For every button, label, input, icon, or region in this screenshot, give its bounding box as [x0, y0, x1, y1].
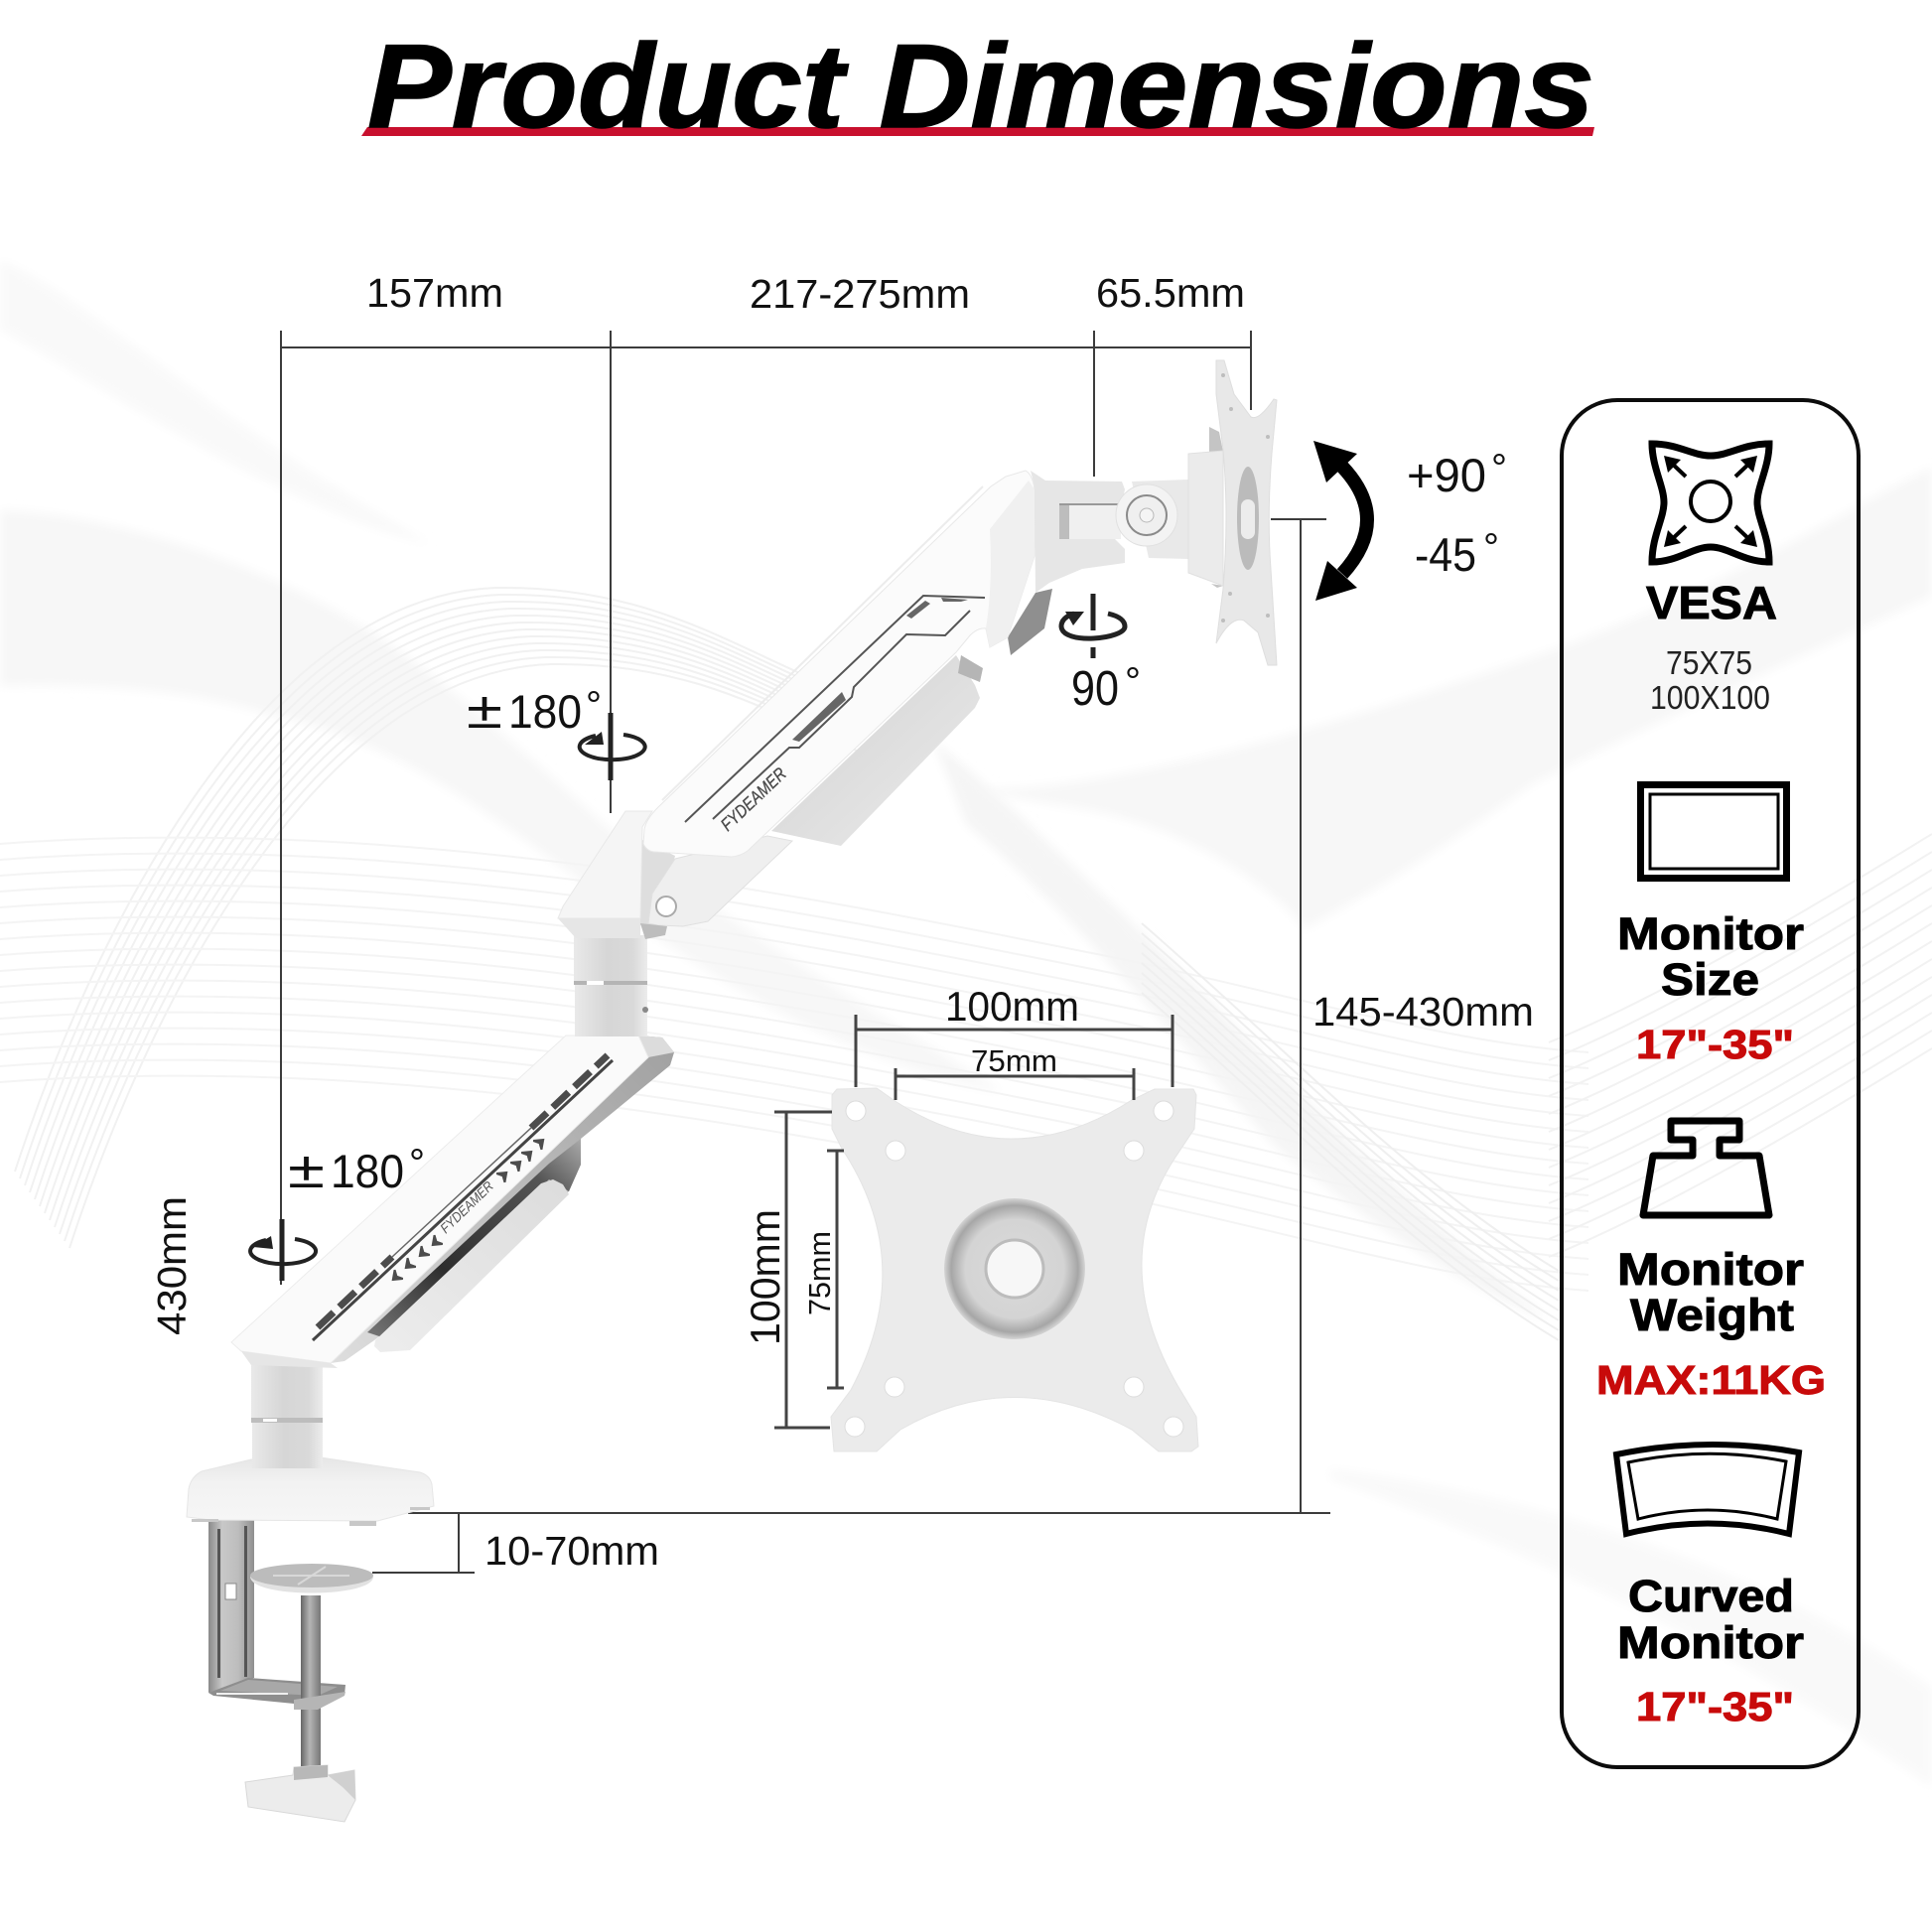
plate outline	[831, 1088, 1198, 1451]
lower column	[251, 1363, 323, 1468]
upper arm gas cover	[771, 655, 980, 846]
rotation label: 180 at base	[288, 1142, 425, 1199]
heading: monitor size: Size	[1661, 954, 1759, 1005]
side view of VESA plate	[1216, 360, 1277, 665]
value: monitor size: 17"-35"	[1636, 1022, 1794, 1067]
rotation label: 90 at head: 90	[1071, 662, 1119, 716]
monitor arm product illustration	[187, 360, 1277, 1822]
tilt block	[1188, 427, 1223, 588]
swivel head	[1031, 471, 1188, 593]
lower arm underside	[331, 1035, 674, 1363]
icon: VESA plate	[1652, 444, 1769, 562]
pivot pin	[656, 897, 676, 916]
VESA label: 75mm vertical: 75mm	[802, 1231, 837, 1315]
heading: monitor weight: Weight	[1630, 1290, 1794, 1340]
rotation label: 180 at elbow: °	[586, 684, 602, 728]
brand lower: FYDEAMER	[437, 1177, 496, 1236]
tilt label: -45: °	[1483, 526, 1499, 570]
icon: monitor	[1640, 784, 1787, 878]
VESA dimension lines	[774, 1015, 1173, 1428]
tilt double arrow	[1313, 441, 1367, 601]
clamp handle	[245, 1765, 355, 1822]
clamp base	[187, 1457, 434, 1526]
panel: specifications	[1562, 400, 1859, 1767]
icon: curved monitor	[1616, 1445, 1799, 1534]
tilt label: +90: +90	[1407, 449, 1486, 501]
heading: curved monitor: Curved	[1628, 1571, 1794, 1621]
dimension lines	[281, 331, 1330, 1573]
heading: monitor size: Monitor	[1617, 908, 1804, 959]
rotation label: 180 at elbow: 180	[508, 685, 582, 738]
VESA label: 75mm horizontal: 75mm	[971, 1043, 1057, 1078]
rotation icon at base	[250, 1219, 316, 1281]
rotation label: 180 at base: ±	[288, 1142, 325, 1199]
heading: monitor weight: Monitor	[1617, 1244, 1804, 1295]
heading: VESA: VESA	[1646, 577, 1777, 628]
column height label: 430mm: 430mm	[149, 1196, 195, 1335]
VESA sizes: 75X75	[1666, 644, 1752, 681]
rotation label: 180 at elbow	[467, 682, 602, 740]
top width label: 217-275mm: 217-275mm	[750, 271, 970, 317]
top width label: 157mm: 157mm	[366, 270, 503, 316]
heading: monitor size	[1617, 908, 1804, 1005]
value: curved monitor size: 17"-35"	[1636, 1684, 1794, 1729]
rotation label: 180 at base: 180	[331, 1145, 404, 1197]
clamp range label: 10-70mm: 10-70mm	[484, 1528, 659, 1574]
rotation icon at elbow	[580, 713, 645, 780]
clamp bracket	[208, 1519, 373, 1769]
lower arm top panel	[231, 1035, 648, 1368]
rotation label: 180 at base: °	[409, 1142, 425, 1185]
VESA sizes: 100X100	[1650, 679, 1770, 716]
mounting holes	[845, 1101, 1183, 1437]
upper arm lower link	[640, 836, 792, 939]
value: max weight: MAX:11KG	[1596, 1357, 1826, 1403]
elbow column	[574, 935, 648, 1036]
elbow block	[558, 811, 652, 938]
heading: curved monitor	[1617, 1571, 1804, 1668]
VESA label: 100mm vertical: 100mm	[742, 1209, 788, 1345]
background swooshes	[0, 260, 1932, 1787]
central hub	[944, 1198, 1085, 1339]
rotation label: 90 at head: °	[1125, 660, 1141, 704]
title with red underline: Product Dimensions	[367, 20, 1594, 153]
rotation icon at head	[1061, 594, 1125, 658]
brand upper: FYDEAMER	[717, 763, 790, 835]
tilt label: +90: °	[1491, 447, 1507, 490]
top width label: 65.5mm: 65.5mm	[1096, 270, 1245, 316]
tilt label: -45: -45	[1415, 528, 1476, 581]
VESA plate front view	[831, 1088, 1198, 1451]
heading: curved monitor: Monitor	[1617, 1617, 1804, 1668]
icon: weight	[1643, 1121, 1769, 1215]
upper arm panel	[643, 471, 1035, 857]
height label: 145-430mm: 145-430mm	[1312, 989, 1534, 1035]
heading: monitor weight	[1617, 1244, 1804, 1340]
head connector under arm	[958, 589, 1052, 682]
VESA sizes	[1650, 644, 1770, 716]
rotation label: 180 at elbow: ±	[467, 682, 502, 740]
VESA label: 100mm horizontal: 100mm	[945, 983, 1079, 1030]
